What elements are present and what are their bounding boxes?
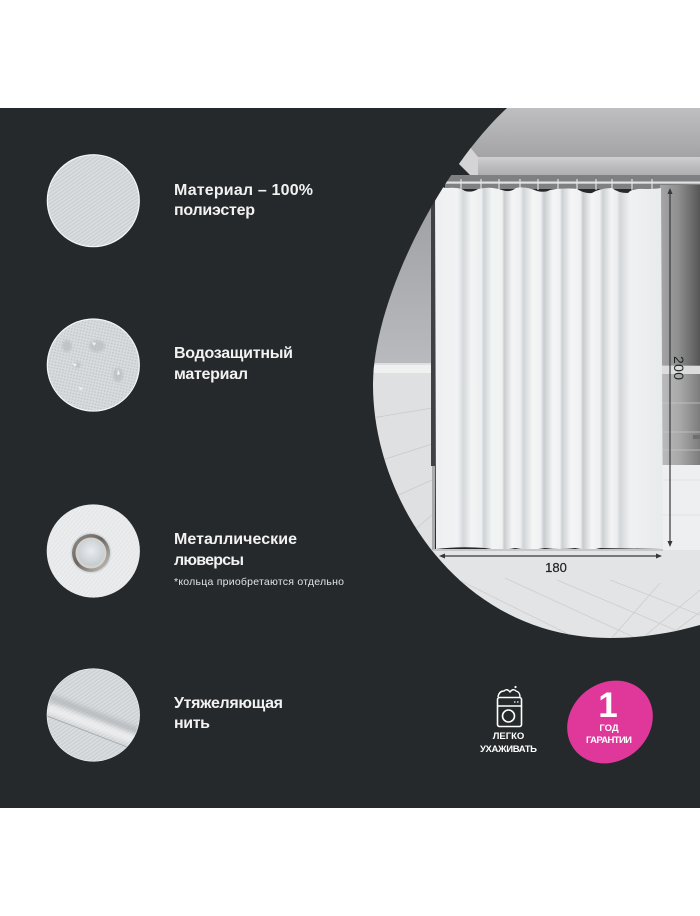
feature text: waterproof: материал [174,366,248,383]
badge: 1 year warranty [551,664,669,780]
badge: 1 year warranty: ГОД [599,723,619,734]
feature text: weight thread: нить [174,715,210,732]
badge: 1 year warranty: ГАРАНТИИ [586,735,632,746]
floor [432,550,700,638]
fabric swatch 4 with weighted thread [47,668,140,762]
curtain [435,187,663,549]
width label 180: 180 [545,560,567,575]
curtain bottom shadow [433,549,663,551]
dark background band [0,108,700,808]
icon: washing machine [498,686,522,726]
right wall reflective tile [660,365,700,555]
left edge dark stripe [431,186,435,466]
right wall [660,185,700,365]
ceiling [463,108,700,158]
feature text: material: Материал – 100% [174,182,313,199]
height label 200: 200 [671,356,687,380]
fabric swatch 1 [47,155,139,247]
badge: 1 year warranty: 1 [598,686,618,725]
cornice [457,147,700,175]
bathroom photo with curtain [370,108,700,645]
feature text: material: полиэстер [174,202,255,219]
height dimension arrow [668,188,672,547]
feature text: weight thread: Утяжеляющая [174,695,283,712]
left tiled wall [370,363,432,553]
label: easy care: ЛЕГКО [493,731,524,742]
back wall shadow behind rod [445,175,700,189]
feature text: grommets: Металлические [174,531,297,548]
feature text: waterproof: Водозащитный [174,345,293,362]
feature text: grommets: люверсы [174,552,244,569]
width dimension arrow [439,554,662,558]
fabric swatch 2 with water drops [47,319,139,411]
fabric swatch 3 with metal grommet [47,504,140,598]
label: easy care: УХАЖИВАТЬ [480,744,537,755]
footnote: *кольца приобретаются отдельно [174,576,344,588]
shower rod with hooks [443,179,700,190]
left wall [374,206,432,363]
